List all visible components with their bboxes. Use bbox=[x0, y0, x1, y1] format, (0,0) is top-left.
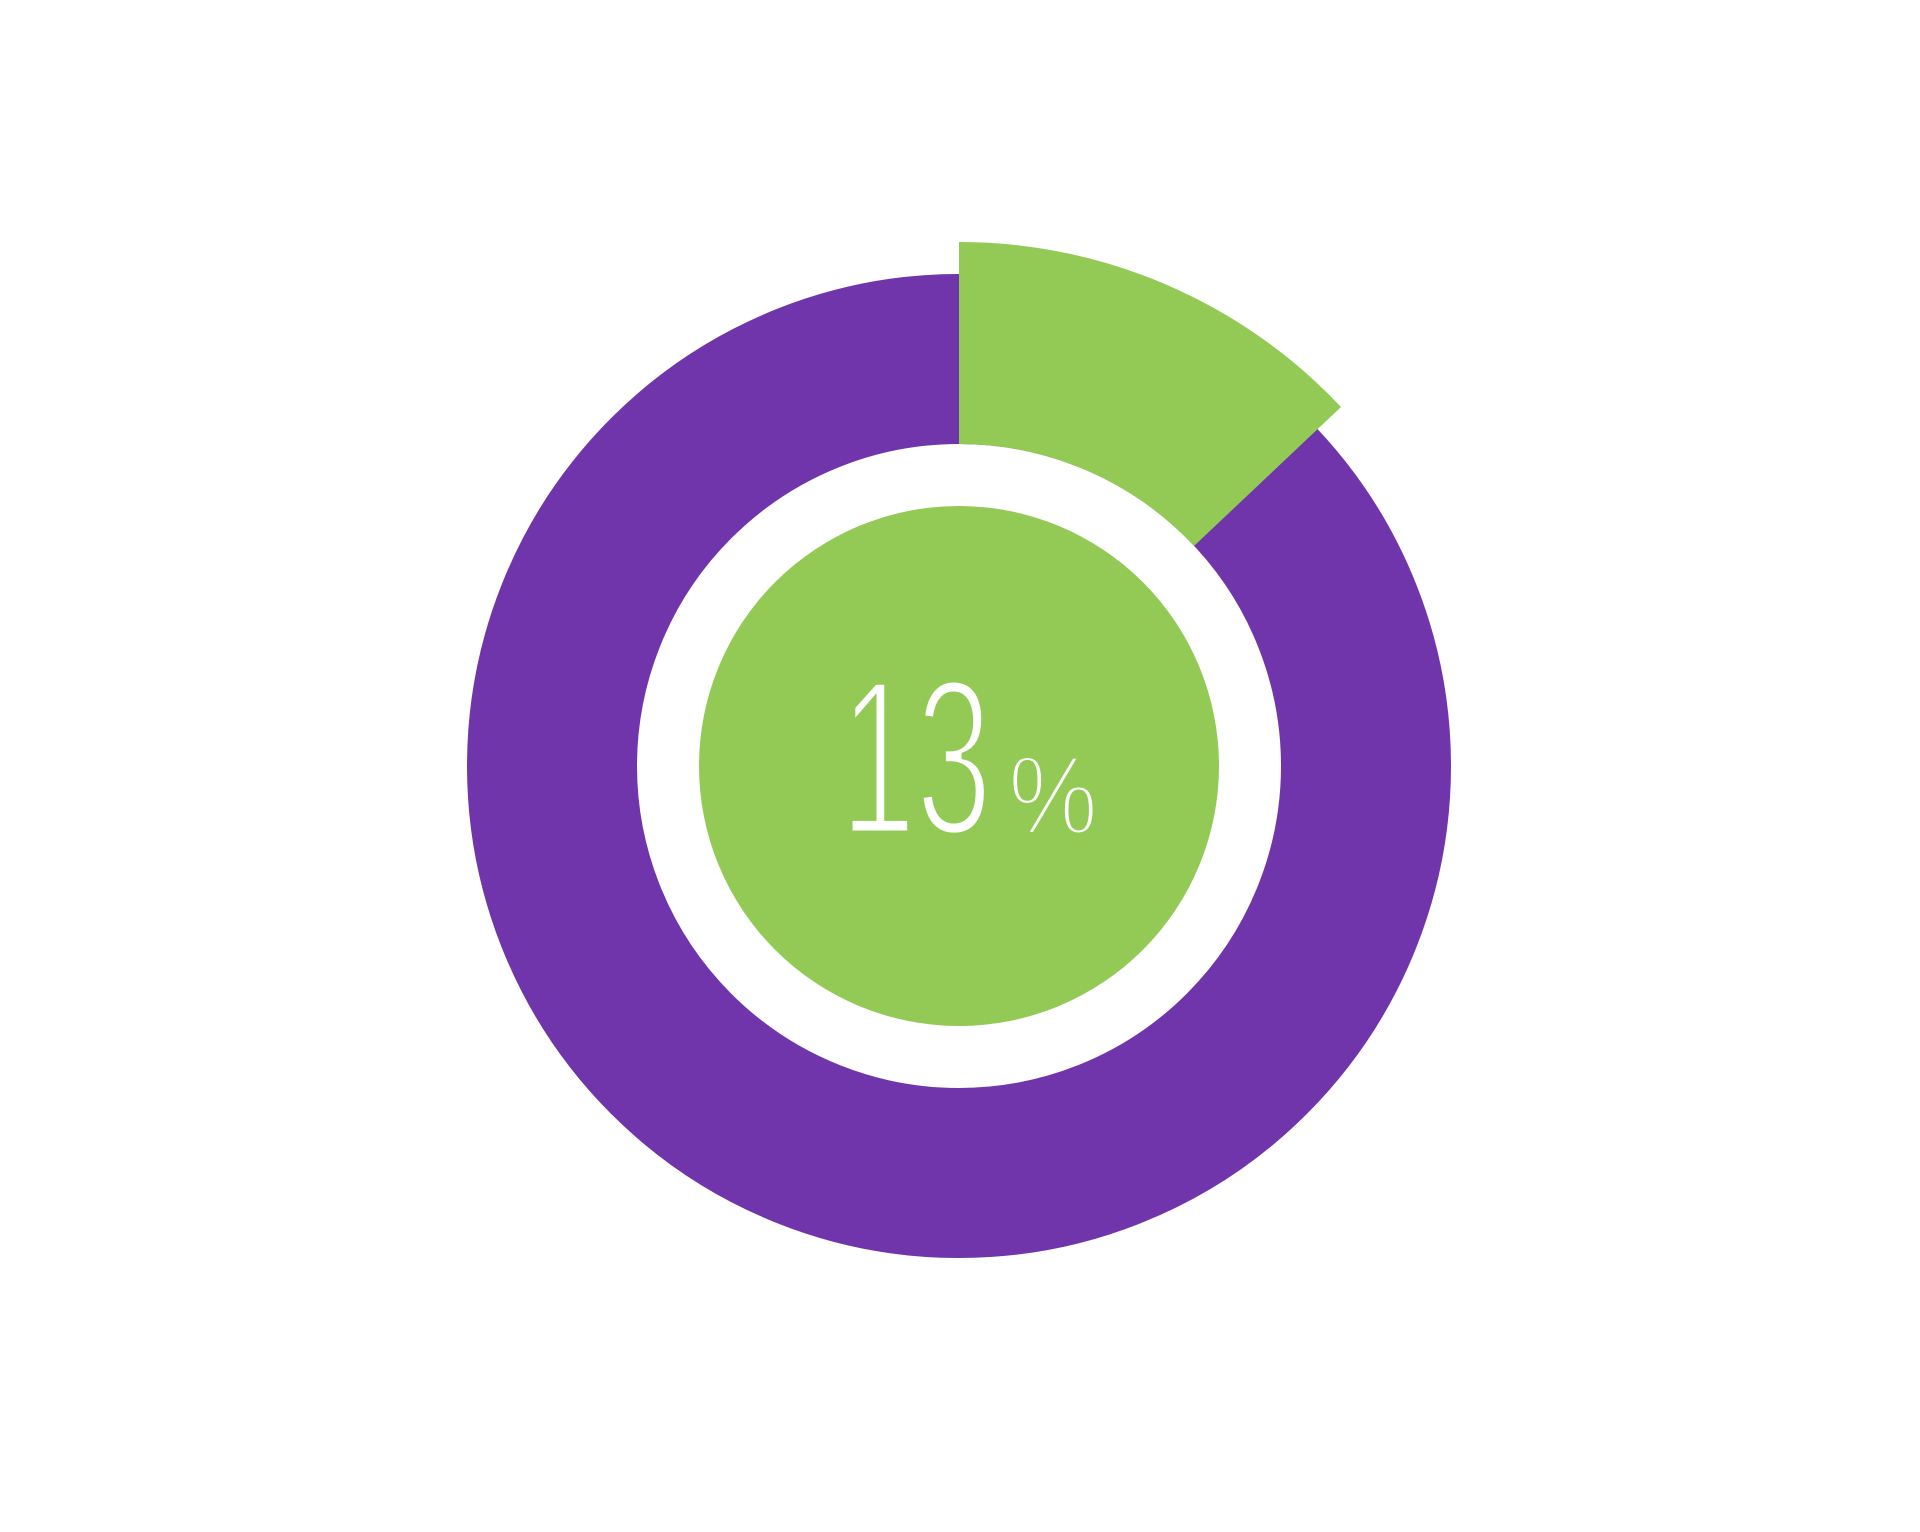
purple ring (remaining 87%) bbox=[552, 359, 1366, 1173]
green highlighted wedge (13%) bbox=[959, 242, 1341, 546]
center green circle bbox=[699, 506, 1219, 1026]
percentage label: % bbox=[1008, 733, 1098, 858]
percentage label: 13 bbox=[840, 634, 992, 882]
